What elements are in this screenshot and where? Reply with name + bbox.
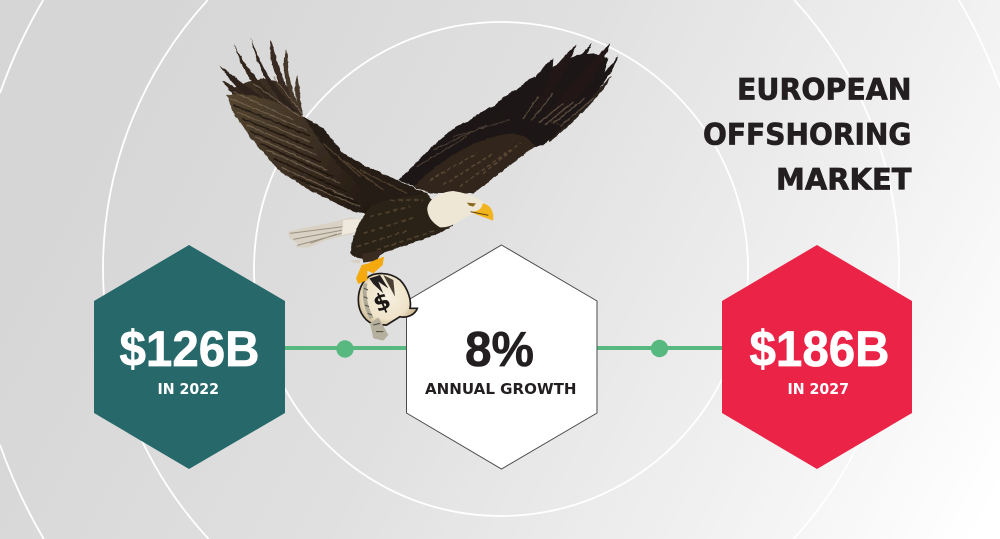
value: 8%: 8% <box>465 323 534 377</box>
eagle right wing <box>398 43 618 193</box>
eagle tail <box>287 217 362 247</box>
eagle head <box>427 191 493 227</box>
value: $186B: $186B <box>750 321 890 377</box>
label: annual growth: ANNUAL GROWTH <box>425 380 576 398</box>
connector lines <box>285 340 723 358</box>
eagle left wing <box>220 37 427 214</box>
eagle talons <box>350 250 384 284</box>
value: $126B: $126B <box>120 321 260 377</box>
money bag <box>358 274 417 341</box>
title: MARKET <box>776 162 912 196</box>
title: OFFSHORING <box>703 118 912 152</box>
hexagon: 2022 value <box>94 245 285 469</box>
illustration: eagle carrying money bag <box>220 37 618 341</box>
hexagon: annual growth <box>406 245 597 469</box>
title <box>703 72 912 196</box>
label: in 2022: IN 2022 <box>158 380 219 398</box>
rope <box>365 283 372 318</box>
title: EUROPEAN <box>737 72 912 106</box>
dollar sign on bag: $ <box>369 286 395 318</box>
hexagon: 2027 value <box>722 245 912 469</box>
label: in 2027: IN 2027 <box>788 380 849 398</box>
eagle body <box>350 193 453 259</box>
